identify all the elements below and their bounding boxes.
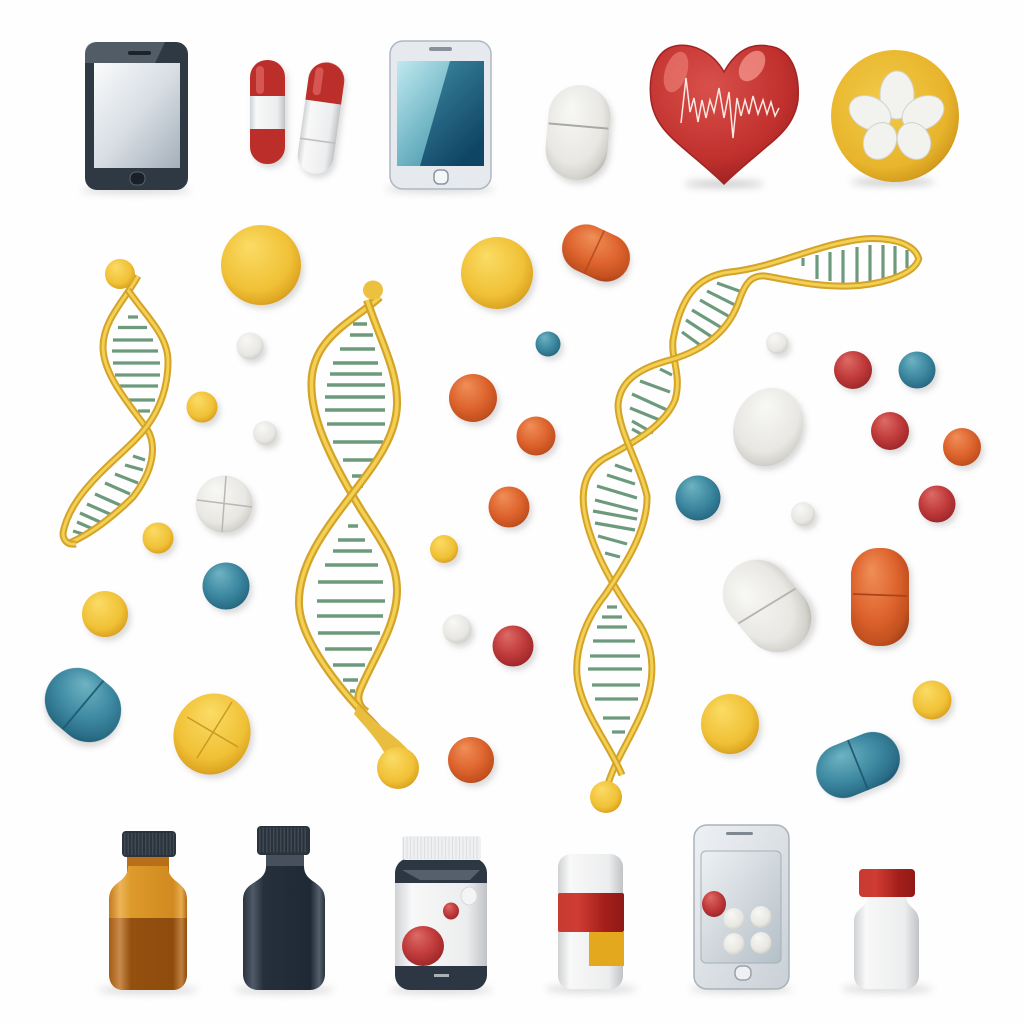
icon: amber bottle: [98, 831, 198, 994]
dna strand: left: [63, 259, 168, 544]
pill: teal scored tablet: [32, 655, 134, 755]
pill: yellow cross-scored tablet: [160, 681, 264, 787]
scattered round pills: [82, 225, 981, 783]
pill: orange scored oval: [554, 216, 638, 290]
pill: white cross-scored tablet: [196, 476, 252, 532]
icon: smartphone with pills: [689, 825, 793, 992]
dna strand: middle: [299, 280, 419, 789]
icon: dark bottle: [234, 826, 334, 994]
icon: red, white and yellow bottle: [545, 854, 637, 992]
pill: white scored oval: [709, 546, 825, 666]
dna strand: right: [577, 239, 919, 813]
icon: red and white capsule: [250, 60, 285, 164]
icon: white oblong tablet: [543, 82, 613, 183]
pill: teal capsule: [808, 724, 908, 806]
icon: dark tablet: [81, 42, 191, 194]
icon: white smartphone with blue screen: [385, 41, 495, 192]
icon: tilted red and white capsule: [295, 60, 347, 176]
icon: yellow coin with white clover: [831, 50, 959, 186]
pill: white oval: [721, 377, 815, 477]
pill: orange capsule: [851, 548, 909, 646]
icon: supplement jar: [389, 836, 493, 994]
icon: red heart with pulse: [650, 45, 798, 188]
icon: white bottle with red cap: [841, 869, 933, 992]
